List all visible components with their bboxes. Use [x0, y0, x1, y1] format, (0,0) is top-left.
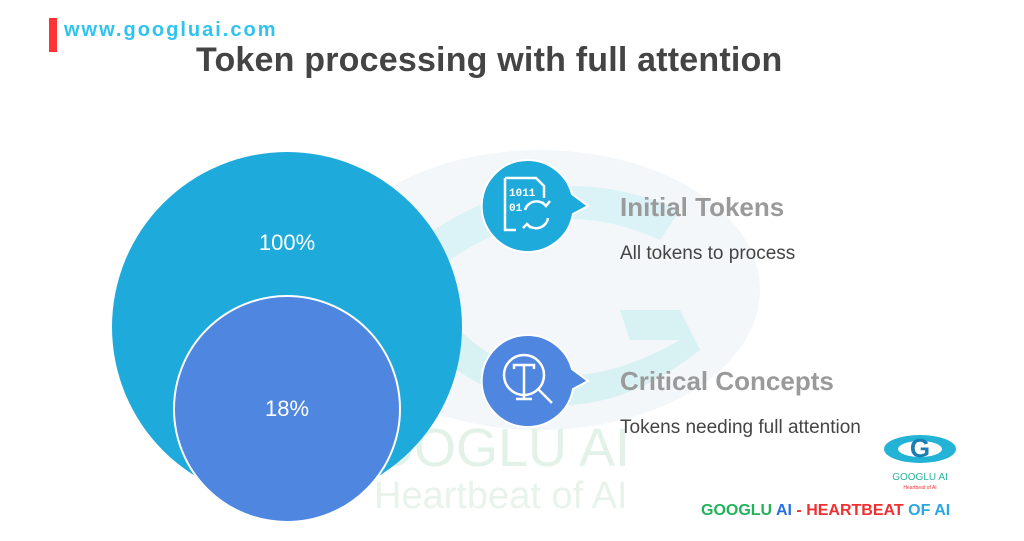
- logo: G: [910, 433, 930, 463]
- logo: GOOGLU AI: [892, 472, 948, 483]
- text: initial tokens: [620, 192, 795, 264]
- text: critical concepts: [620, 366, 861, 438]
- icon: initial tokens: [480, 159, 590, 253]
- text: critical concepts: Tokens needing full attention: [620, 417, 861, 438]
- inner circle 18%: 18%: [265, 396, 309, 421]
- icon: initial tokens: 1011: [509, 188, 536, 200]
- chart: nested circles: [112, 152, 462, 521]
- text: critical concepts: Critical Concepts: [620, 366, 834, 396]
- watermark background: [392, 150, 760, 430]
- url header: www.googluai.com: [64, 19, 277, 41]
- text: initial tokens: Initial Tokens: [620, 192, 784, 222]
- text: initial tokens: All tokens to process: [620, 243, 795, 264]
- footer brand: GOOGLU AI - HEARTBEAT OF AI: [701, 502, 950, 519]
- watermark text: OOGLU AI: [372, 418, 630, 478]
- watermark text: [372, 418, 630, 517]
- logo: [884, 433, 956, 491]
- outer circle 100%: [112, 152, 462, 502]
- outer circle 100%: 100%: [259, 230, 315, 255]
- logo: Heartbeat of AI: [903, 485, 937, 491]
- icon: initial tokens: 01: [509, 203, 523, 215]
- url header: [49, 18, 277, 52]
- icon: critical concepts: [480, 334, 590, 428]
- watermark text: Heartbeat of AI: [374, 475, 628, 517]
- title: Token processing with full attention: [196, 41, 782, 79]
- inner circle 18%: [174, 296, 400, 522]
